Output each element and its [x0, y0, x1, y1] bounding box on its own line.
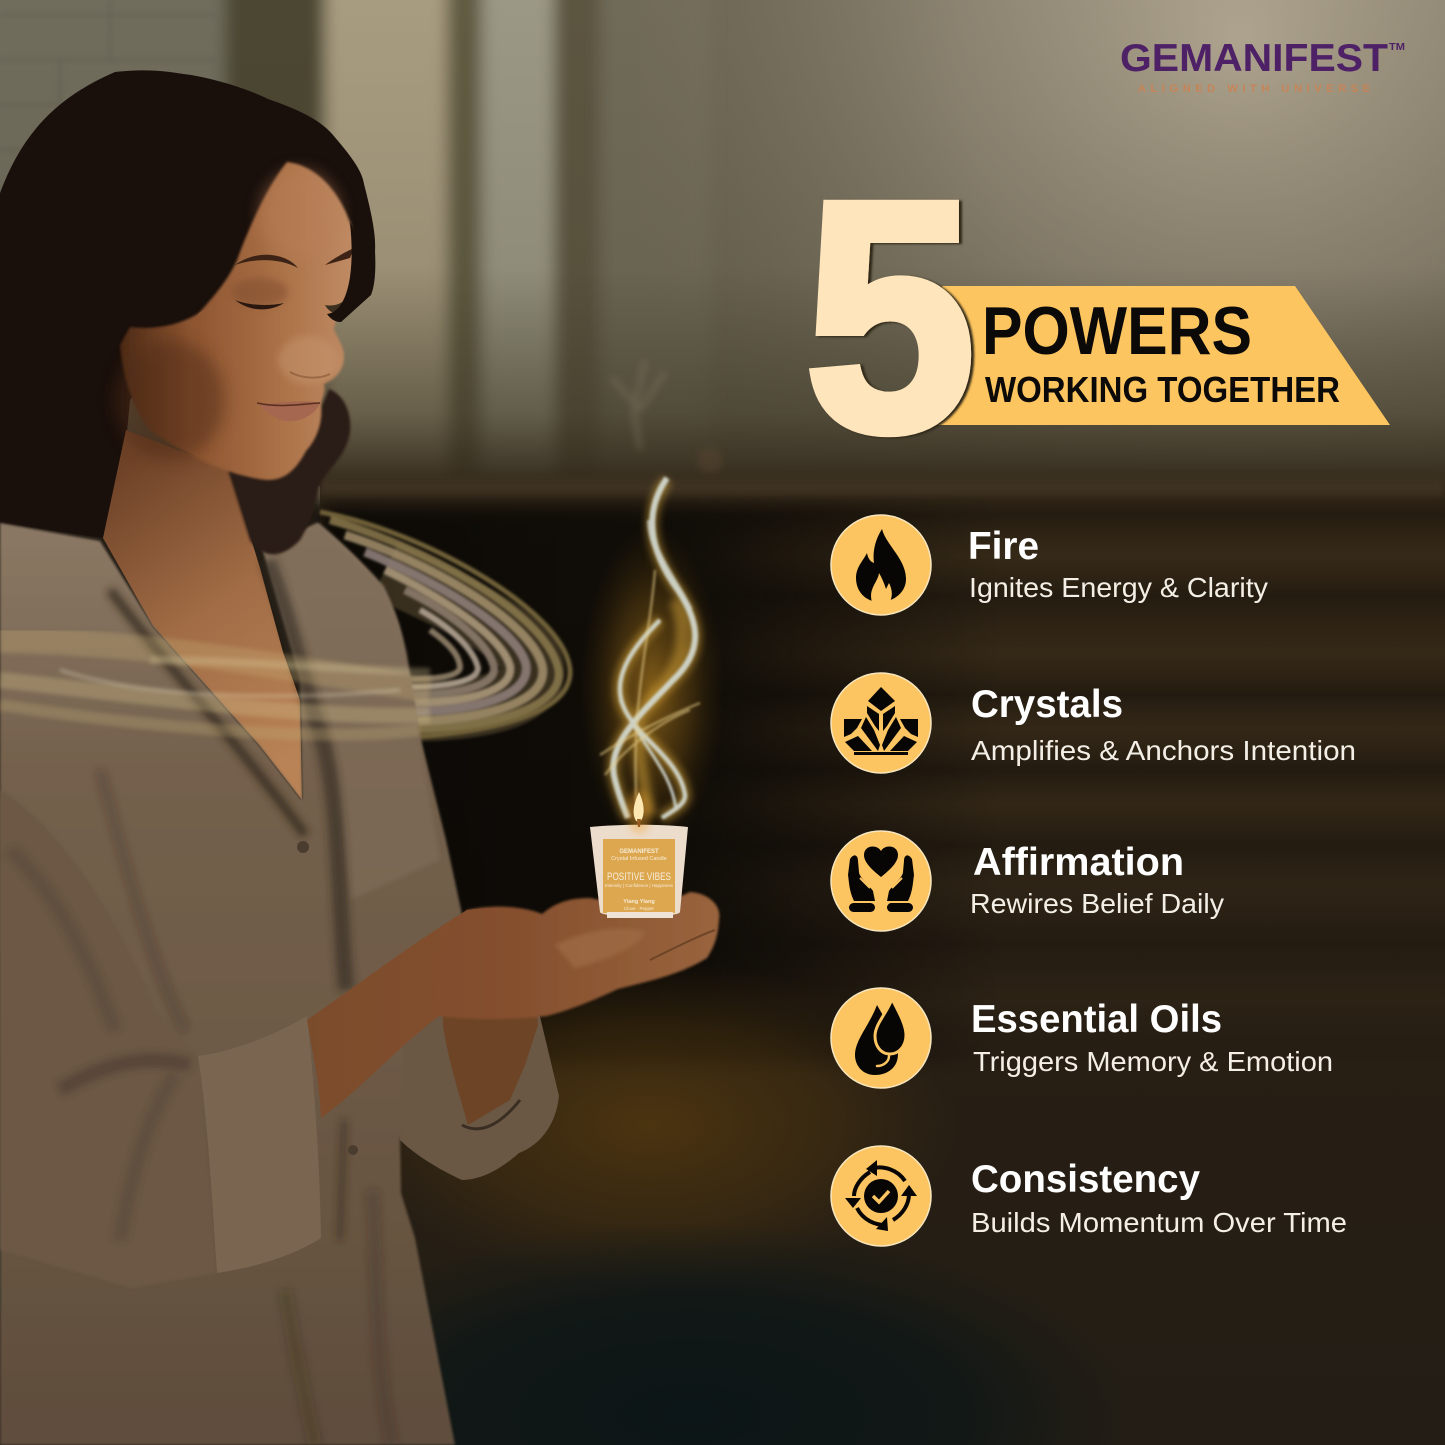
power: Crystals: Crystals [971, 683, 1123, 726]
curly hair lock [228, 389, 350, 554]
candle label text: POSITIVE VIBES [607, 871, 671, 883]
candle label text: GEMANIFEST [619, 849, 659, 855]
buttons [297, 841, 358, 1155]
heading banner [805, 135, 1390, 499]
power: Consistency [831, 1146, 1347, 1246]
forearm [307, 908, 560, 1118]
ribbon [938, 286, 1390, 425]
side hair strand [327, 222, 362, 322]
power: Crystals [831, 673, 1356, 773]
background ornament vase [612, 360, 723, 473]
power: Affirmation: Affirmation [973, 841, 1184, 884]
candle [590, 790, 688, 918]
sleeve cuff [198, 1016, 321, 1273]
sleeve upper arm [0, 790, 217, 1288]
icon: cycle with check [831, 1146, 931, 1246]
big number 5: 5 [805, 135, 975, 499]
power: Fire [831, 515, 1268, 615]
candle label text: Clove · Pepper [624, 906, 655, 911]
candle label text [605, 849, 674, 911]
power: Fire: Ignites Energy & Clarity [969, 572, 1268, 603]
heading text: WORKING TOGETHER [985, 369, 1340, 410]
candle label text: Intensity | Confidence | Happiness [605, 883, 674, 888]
candle flame [627, 790, 651, 834]
candle label text: Ylang Ylang [623, 899, 655, 905]
icon: flame [831, 515, 931, 615]
icon: oil drops [831, 988, 931, 1088]
bodice folds [100, 560, 392, 1445]
power: Essential Oils [831, 988, 1333, 1088]
heading text [982, 293, 1340, 410]
logo: TM [1389, 42, 1405, 53]
hand [436, 892, 719, 1019]
dark wood panel [316, 482, 1445, 1445]
power: Crystals: Amplifies & Anchors Intention [971, 735, 1356, 766]
logo: GEMANIFEST [1120, 37, 1388, 80]
candle label text: Crystal Infused Candle [611, 856, 667, 862]
neck and chest [103, 430, 302, 800]
logo: ALIGNED WITH UNIVERSE [1138, 83, 1370, 95]
icon: crystals [831, 673, 931, 773]
logo [1120, 37, 1405, 95]
face [115, 162, 355, 480]
power: Consistency: Builds Momentum Over Time [971, 1207, 1347, 1238]
icon: hands and heart [831, 831, 931, 931]
power: Consistency: Consistency [971, 1158, 1200, 1201]
hair swirl [320, 512, 570, 738]
power: Affirmation [831, 831, 1224, 931]
heading text: POWERS [982, 293, 1252, 369]
chest energy wave [0, 640, 430, 735]
power: Essential Oils: Essential Oils [971, 998, 1222, 1041]
power: Affirmation: Rewires Belief Daily [970, 888, 1224, 919]
right lapel highlight [270, 523, 440, 900]
hair [0, 70, 375, 538]
power: Fire: Fire [968, 525, 1039, 568]
woman figure [0, 70, 719, 1445]
right arm sleeve behind [400, 995, 559, 1180]
power: Essential Oils: Triggers Memory & Emotion [973, 1046, 1333, 1077]
shirt torso [0, 523, 462, 1445]
candle smoke [580, 478, 724, 855]
